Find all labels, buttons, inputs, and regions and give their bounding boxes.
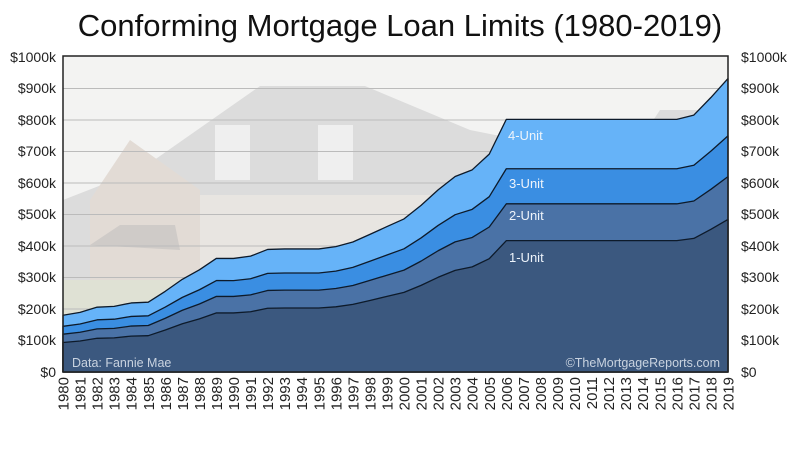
right axis labels: $500k xyxy=(741,206,780,222)
x axis year labels: 1999 xyxy=(379,377,396,410)
x axis year labels xyxy=(56,377,737,410)
left axis labels: $300k xyxy=(18,269,57,285)
area: 2-Unit xyxy=(63,177,728,372)
x axis year labels: 2004 xyxy=(465,377,482,410)
right axis labels: $600k xyxy=(741,175,780,191)
x axis year labels: 2016 xyxy=(669,377,686,410)
background photo: house xyxy=(63,56,728,372)
left axis labels: $700k xyxy=(18,143,57,159)
left axis labels: $200k xyxy=(18,301,57,317)
x axis year labels: 2001 xyxy=(414,377,431,410)
x axis year labels: 1983 xyxy=(107,377,124,410)
left axis labels: $900k xyxy=(18,80,57,96)
credit note: ©TheMortgageReports.com xyxy=(566,356,720,370)
right axis labels: $400k xyxy=(741,238,780,254)
x axis year labels: 1989 xyxy=(209,377,226,410)
x axis year labels: 1985 xyxy=(141,377,158,410)
x axis year labels: 2010 xyxy=(567,377,584,410)
left axis labels: $500k xyxy=(18,206,57,222)
x axis year labels: 2017 xyxy=(686,377,703,410)
left axis labels: $800k xyxy=(18,112,57,128)
right axis labels: $0 xyxy=(741,364,757,380)
x axis year labels: 2018 xyxy=(703,377,720,410)
x axis year labels: 1997 xyxy=(345,377,362,410)
area: 4-Unit xyxy=(63,79,728,372)
right axis labels: $200k xyxy=(741,301,780,317)
x axis year labels: 1998 xyxy=(362,377,379,410)
grid lines xyxy=(63,88,728,340)
right axis labels: $1000k xyxy=(741,49,788,65)
x axis year labels: 2014 xyxy=(635,377,652,410)
left axis labels: $400k xyxy=(18,238,57,254)
left axis labels: $1000k xyxy=(10,49,57,65)
x axis year labels: 2008 xyxy=(533,377,550,410)
series labels xyxy=(508,128,544,265)
x axis year labels: 2002 xyxy=(431,377,448,410)
x axis year labels: 1994 xyxy=(294,377,311,410)
x axis year labels: 2009 xyxy=(550,377,567,410)
right axis labels: $800k xyxy=(741,112,780,128)
x axis year labels: 1992 xyxy=(260,377,277,410)
x axis year labels: 2019 xyxy=(720,377,737,410)
x axis year labels: 1987 xyxy=(175,377,192,410)
x axis year labels: 2007 xyxy=(516,377,533,410)
x axis year labels: 2015 xyxy=(652,377,669,410)
right axis labels: $100k xyxy=(741,332,780,348)
x axis year labels: 1984 xyxy=(124,377,141,410)
x axis year labels: 1986 xyxy=(158,377,175,410)
source note: Data: Fannie Mae xyxy=(72,356,171,370)
left axis labels xyxy=(10,49,57,380)
x axis year labels: 1991 xyxy=(243,377,260,410)
x axis year labels: 2006 xyxy=(499,377,516,410)
x axis year labels: 1988 xyxy=(192,377,209,410)
right axis labels xyxy=(741,49,788,380)
right axis labels: $300k xyxy=(741,269,780,285)
series labels: 1-Unit xyxy=(509,250,544,265)
x axis year labels: 2011 xyxy=(584,377,601,409)
plot frame xyxy=(63,56,728,372)
left axis labels: $600k xyxy=(18,175,57,191)
series labels: 4-Unit xyxy=(508,128,543,143)
x axis year labels: 2000 xyxy=(396,377,414,410)
x axis year labels: 1982 xyxy=(90,377,107,410)
area: 3-Unit xyxy=(63,136,728,372)
left axis labels: $0 xyxy=(40,364,56,380)
x axis year labels: 1993 xyxy=(277,377,294,410)
x axis year labels: 1996 xyxy=(328,377,345,410)
x axis year labels: 2003 xyxy=(448,377,465,410)
area chart xyxy=(63,79,728,372)
right axis labels: $700k xyxy=(741,143,780,159)
area: 1-Unit xyxy=(63,219,728,372)
series labels: 2-Unit xyxy=(509,208,544,223)
x axis year labels: 2005 xyxy=(482,377,499,410)
title: Conforming Mortgage Loan Limits (1980-2019) xyxy=(78,8,722,43)
left axis labels: $100k xyxy=(18,332,57,348)
x axis year labels: 2013 xyxy=(618,377,635,410)
right axis labels: $900k xyxy=(741,80,780,96)
x axis year labels: 1980 xyxy=(56,377,72,410)
x axis year labels: 2012 xyxy=(601,377,618,410)
x axis year labels: 1981 xyxy=(73,377,90,410)
x axis year labels: 1990 xyxy=(226,377,243,410)
series labels: 3-Unit xyxy=(509,176,544,191)
x axis year labels: 1995 xyxy=(311,377,328,410)
